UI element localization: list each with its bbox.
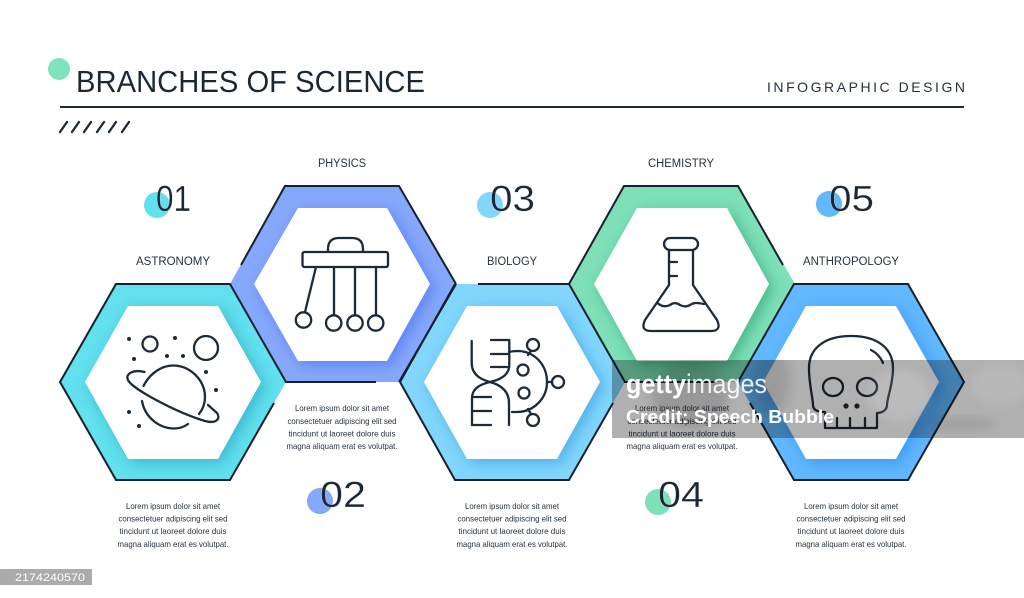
- hexagon outlines: [60, 186, 964, 480]
- watermark logo: gettyimages: [626, 369, 767, 399]
- hexagon 5: anthropology: [738, 284, 964, 480]
- icon: newton's cradle: [296, 238, 388, 331]
- hexagon 4: chemistry: [569, 186, 795, 382]
- text block: chemistry: tincidunt ut laoreet dolore duis: [628, 428, 736, 438]
- text block: astronomy: tincidunt ut laoreet dolore duis: [120, 526, 226, 536]
- number 03: 03: [490, 178, 535, 219]
- label: anthropology: ANTHROPOLOGY: [803, 256, 899, 268]
- text block: physics: tincidunt ut laoreet dolore duis: [288, 428, 396, 438]
- hexagon 3: biology: [400, 284, 625, 480]
- watermark band: [612, 360, 1024, 438]
- label: biology: BIOLOGY: [487, 256, 537, 268]
- text block: physics: [286, 403, 398, 451]
- number 01: 01: [156, 178, 191, 219]
- number 04: 04: [658, 474, 704, 515]
- text block: astronomy: consectetuer adipiscing elit sed: [118, 514, 228, 524]
- text block: biology: [456, 501, 568, 549]
- icon: dna and cell: [472, 339, 564, 426]
- text block: anthropology: consectetuer adipiscing elit sed: [796, 514, 906, 524]
- text block: biology: Lorem ipsum dolor sit amet: [465, 501, 560, 511]
- number 03: [477, 178, 535, 219]
- number 01: [144, 178, 191, 219]
- header accent dot: [48, 58, 70, 80]
- header: [48, 58, 965, 132]
- title: BRANCHES OF SCIENCE: [76, 64, 425, 99]
- text block: astronomy: magna aliquam erat es volutpat.: [118, 539, 228, 549]
- icon: flask: [643, 238, 719, 331]
- icon: planet: [127, 336, 218, 428]
- text block: anthropology: tincidunt ut laoreet dolore duis: [798, 526, 904, 536]
- image id tag: [0, 569, 92, 585]
- header rule: [60, 106, 964, 108]
- number 04: [645, 474, 704, 515]
- subtitle: INFOGRAPHIC DESIGN: [767, 79, 965, 95]
- label: physics: PHYSICS: [318, 158, 366, 170]
- text block: physics: consectetuer adipiscing elit sed: [288, 416, 397, 426]
- icon: skull: [809, 336, 893, 428]
- slash marks: [60, 122, 129, 132]
- text block: chemistry: consectetuer adipiscing elit sed: [628, 416, 737, 426]
- image id tag: 2174240570: [15, 572, 85, 584]
- label: astronomy: ASTRONOMY: [136, 256, 210, 268]
- text block: anthropology: magna aliquam erat es volutpat.: [796, 539, 906, 549]
- number 02: 02: [320, 474, 366, 515]
- text block: biology: magna aliquam erat es volutpat.: [456, 539, 568, 549]
- number 02: [307, 474, 366, 515]
- text block: astronomy: [118, 501, 228, 549]
- text block: physics: magna aliquam erat es volutpat.: [286, 441, 398, 451]
- hexagon 2: physics: [230, 186, 456, 382]
- text block: chemistry: magna aliquam erat es volutpat.: [626, 441, 738, 451]
- text block: biology: consectetuer adipiscing elit sed: [458, 514, 567, 524]
- hexagon 1: astronomy: [60, 284, 286, 480]
- text block: chemistry: Lorem ipsum dolor sit amet: [635, 403, 730, 413]
- label: chemistry: CHEMISTRY: [648, 158, 714, 170]
- text block: chemistry: [626, 403, 738, 451]
- number 05: [816, 178, 874, 219]
- text block: physics: Lorem ipsum dolor sit amet: [295, 403, 390, 413]
- text block: anthropology: [796, 501, 906, 549]
- watermark credit: Credit: Speech Bubble: [626, 407, 834, 427]
- text block: biology: tincidunt ut laoreet dolore duis: [458, 526, 566, 536]
- number 05: 05: [829, 178, 874, 219]
- text block: astronomy: Lorem ipsum dolor sit amet: [126, 501, 221, 511]
- text block: anthropology: Lorem ipsum dolor sit amet: [804, 501, 899, 511]
